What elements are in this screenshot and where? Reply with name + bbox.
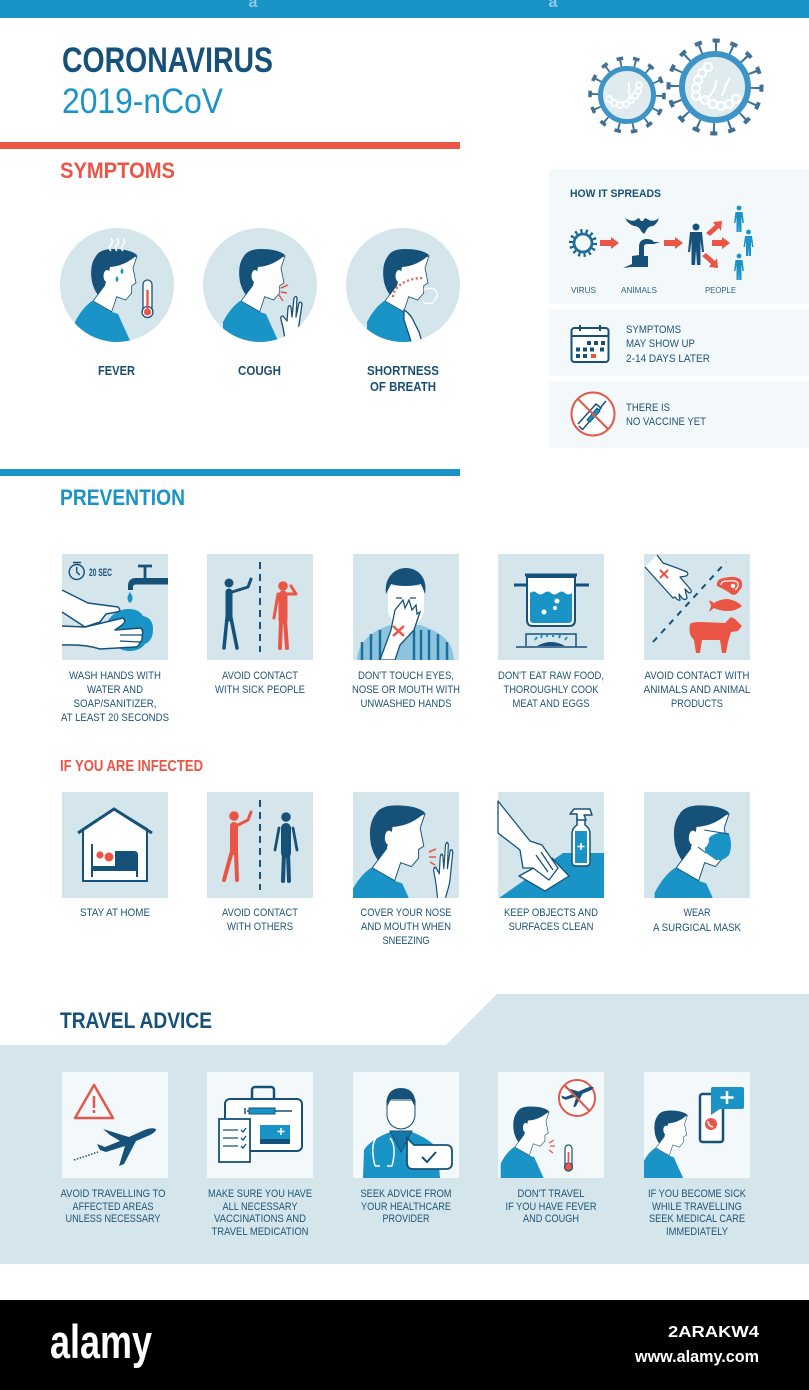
text: symptoms timing: MAY SHOW UP bbox=[626, 338, 695, 350]
caption: SEEK ADVICE FROM bbox=[360, 1188, 452, 1200]
travel: seek advice bbox=[353, 1072, 459, 1225]
caption: WITH OTHERS bbox=[227, 921, 293, 933]
heading: symptoms: SYMPTOMS bbox=[60, 158, 175, 183]
caption: UNWASHED HANDS bbox=[360, 698, 452, 710]
caption: AFFECTED AREAS bbox=[72, 1201, 154, 1213]
blue rule bbox=[0, 469, 460, 476]
label: fever: FEVER bbox=[98, 364, 135, 378]
caption: WEAR bbox=[684, 907, 711, 919]
caption: AT LEAST 20 SECONDS bbox=[61, 712, 169, 724]
caption: ANIMALS AND ANIMAL bbox=[644, 684, 750, 696]
text: no vaccine: NO VACCINE YET bbox=[626, 416, 706, 428]
heading: if you are infected: IF YOU ARE INFECTED bbox=[60, 758, 203, 775]
top bar bbox=[0, 0, 809, 18]
caption: TRAVEL MEDICATION bbox=[212, 1226, 308, 1238]
caption: AVOID TRAVELLING TO bbox=[60, 1188, 166, 1200]
icon: checklist bbox=[219, 1119, 250, 1162]
caption: SOAP/SANITIZER, bbox=[74, 698, 156, 710]
infected: clean surfaces bbox=[498, 792, 604, 933]
icon: virus bbox=[571, 231, 595, 255]
icon: thermometer bbox=[564, 1145, 572, 1171]
title bbox=[62, 41, 273, 121]
icon: timer bbox=[69, 562, 84, 580]
caption bbox=[648, 1188, 747, 1238]
arrow bbox=[664, 237, 683, 249]
travel: seek care if sick bbox=[643, 1072, 750, 1238]
caption: MAKE SURE YOU HAVE bbox=[208, 1188, 312, 1200]
infected: avoid contact with others bbox=[207, 792, 313, 933]
caption: IF YOU HAVE FEVER bbox=[506, 1201, 597, 1213]
diagram labels bbox=[571, 285, 736, 295]
caption: SURFACES CLEAN bbox=[508, 921, 594, 933]
icon: plane bbox=[74, 1128, 156, 1166]
icon: medical message bbox=[711, 1087, 744, 1115]
icon: cloth and hand bbox=[498, 801, 569, 891]
heading: prevention: PREVENTION bbox=[60, 485, 185, 510]
prevention: cook food bbox=[498, 554, 604, 710]
caption: WASH HANDS WITH bbox=[69, 670, 161, 682]
icons: people bbox=[734, 206, 754, 280]
heading: travel advice: TRAVEL ADVICE bbox=[60, 1008, 212, 1033]
caption: AVOID CONTACT WITH bbox=[644, 670, 750, 682]
icon: fish bbox=[709, 599, 742, 612]
text: symptoms timing bbox=[626, 324, 710, 365]
icon: cow bbox=[690, 617, 742, 653]
icon: hand with cross bbox=[645, 555, 691, 600]
symptom: cough bbox=[203, 228, 317, 378]
label: shortness of breath bbox=[367, 364, 439, 394]
caption: WITH SICK PEOPLE bbox=[215, 684, 305, 696]
prevention: don't touch face bbox=[352, 554, 460, 710]
caption bbox=[352, 670, 460, 710]
text: symptoms timing: SYMPTOMS bbox=[626, 324, 681, 336]
caption bbox=[222, 907, 298, 933]
caption: ALL NECESSARY bbox=[222, 1201, 298, 1213]
caption: NOSE OR MOUTH WITH bbox=[352, 684, 460, 696]
caption: SNEEZING bbox=[382, 935, 430, 947]
caption: SEEK MEDICAL CARE bbox=[649, 1213, 745, 1225]
symptom: fever bbox=[60, 228, 174, 378]
caption: WATER AND bbox=[87, 684, 143, 696]
caption: COVER YOUR NOSE bbox=[360, 907, 452, 919]
icon: no flying bbox=[559, 1080, 595, 1116]
caption: VACCINATIONS AND bbox=[214, 1213, 306, 1225]
icon: meat bbox=[717, 577, 742, 595]
footer bar bbox=[0, 1300, 809, 1390]
icon: virus particles bbox=[590, 40, 762, 134]
text: no vaccine bbox=[626, 402, 706, 428]
prevention: avoid animals bbox=[644, 554, 750, 710]
diagram labels: PEOPLE bbox=[705, 285, 736, 295]
caption: THOROUGHLY COOK bbox=[504, 684, 599, 696]
image id and site bbox=[634, 1324, 759, 1366]
arrows: spreading bbox=[702, 221, 730, 268]
icon: snake bbox=[623, 239, 660, 268]
figure: sick person bbox=[274, 581, 296, 648]
infected: cover nose and mouth bbox=[351, 792, 459, 947]
icon: bed bbox=[92, 844, 138, 877]
icon: checked card bbox=[407, 1138, 452, 1169]
text: no vaccine: THERE IS bbox=[626, 402, 670, 414]
icon: burner bbox=[516, 634, 587, 647]
caption bbox=[208, 1188, 312, 1238]
label: shortness of breath: OF BREATH bbox=[370, 380, 436, 394]
panel: how it spreads: HOW IT SPREADS bbox=[570, 188, 661, 200]
caption: WHILE TRAVELLING bbox=[652, 1201, 742, 1213]
travel: vaccinations and medication bbox=[207, 1072, 313, 1238]
prevention: wash hands bbox=[61, 554, 169, 724]
title: CORONAVIRUS bbox=[62, 41, 273, 80]
caption: YOUR HEALTHCARE bbox=[361, 1201, 451, 1213]
figure: other person bbox=[275, 812, 297, 881]
caption bbox=[653, 907, 742, 934]
infected: wear mask bbox=[644, 792, 750, 934]
stock logo: alamy bbox=[50, 1315, 152, 1368]
arrow bbox=[600, 237, 619, 249]
caption: PRODUCTS bbox=[671, 698, 723, 710]
icon: person bbox=[688, 224, 704, 265]
panel: no vaccine bbox=[549, 381, 809, 448]
caption: MEAT AND EGGS bbox=[512, 698, 590, 710]
caption bbox=[498, 670, 604, 710]
caption: AND MOUTH WHEN bbox=[361, 921, 451, 933]
caption: AVOID CONTACT bbox=[222, 907, 298, 919]
travel panel background bbox=[0, 994, 809, 1264]
caption bbox=[644, 670, 750, 710]
caption bbox=[360, 1188, 452, 1225]
caption: UNLESS NECESSARY bbox=[66, 1213, 160, 1225]
caption: KEEP OBJECTS AND bbox=[504, 907, 598, 919]
caption bbox=[504, 907, 598, 933]
caption: DON'T TRAVEL bbox=[518, 1188, 584, 1200]
caption bbox=[506, 1188, 597, 1225]
figure: healthy person bbox=[224, 578, 251, 648]
title: 2019-nCoV bbox=[62, 82, 224, 121]
icon: calendar bbox=[572, 325, 608, 362]
travel: don't travel if sick bbox=[498, 1072, 604, 1225]
caption: IF YOU BECOME SICK bbox=[648, 1188, 747, 1200]
icon: spray bottle bbox=[570, 809, 592, 866]
figure: infected person bbox=[224, 811, 251, 880]
icon: doctor bbox=[363, 1088, 440, 1178]
caption bbox=[215, 670, 305, 696]
diagram labels: VIRUS bbox=[571, 285, 596, 295]
panel: incubation bbox=[549, 309, 809, 376]
panel: how it spreads bbox=[549, 170, 809, 304]
caption: AVOID CONTACT bbox=[222, 670, 298, 682]
symptom: shortness of breath bbox=[346, 228, 460, 394]
icon: no syringe bbox=[572, 392, 614, 436]
caption bbox=[360, 907, 452, 947]
icon: medical case bbox=[225, 1087, 302, 1151]
travel: avoid affected areas bbox=[60, 1072, 168, 1225]
caption bbox=[61, 670, 169, 724]
label: shortness of breath: SHORTNESS bbox=[367, 364, 439, 378]
prevention: avoid sick people bbox=[207, 554, 313, 696]
icon: phone bbox=[700, 1094, 723, 1142]
caption bbox=[60, 1188, 166, 1225]
diagram labels: ANIMALS bbox=[621, 285, 657, 295]
caption: PROVIDER bbox=[382, 1213, 430, 1225]
caption: DON'T TOUCH EYES, bbox=[358, 670, 454, 682]
icon: warning triangle bbox=[75, 1085, 113, 1118]
icon: pot bbox=[514, 575, 589, 626]
caption: A SURGICAL MASK bbox=[653, 922, 742, 934]
icon: house bbox=[83, 809, 147, 881]
label: cough: COUGH bbox=[238, 364, 281, 378]
icon: bat bbox=[625, 218, 659, 234]
caption: STAY AT HOME bbox=[80, 907, 150, 919]
caption: IMMEDIATELY bbox=[666, 1226, 728, 1238]
red rule bbox=[0, 142, 460, 149]
infected: stay at home bbox=[62, 792, 168, 919]
image id and site: www.alamy.com bbox=[634, 1347, 759, 1366]
caption: DON'T EAT RAW FOOD, bbox=[498, 670, 604, 682]
text: symptoms timing: 2-14 DAYS LATER bbox=[626, 353, 710, 365]
icon: faucet bbox=[128, 566, 168, 590]
caption: AND COUGH bbox=[523, 1213, 579, 1225]
prevention: wash hands: 20 SEC bbox=[89, 567, 112, 579]
image id and site: 2ARAKW4 bbox=[668, 1324, 759, 1341]
